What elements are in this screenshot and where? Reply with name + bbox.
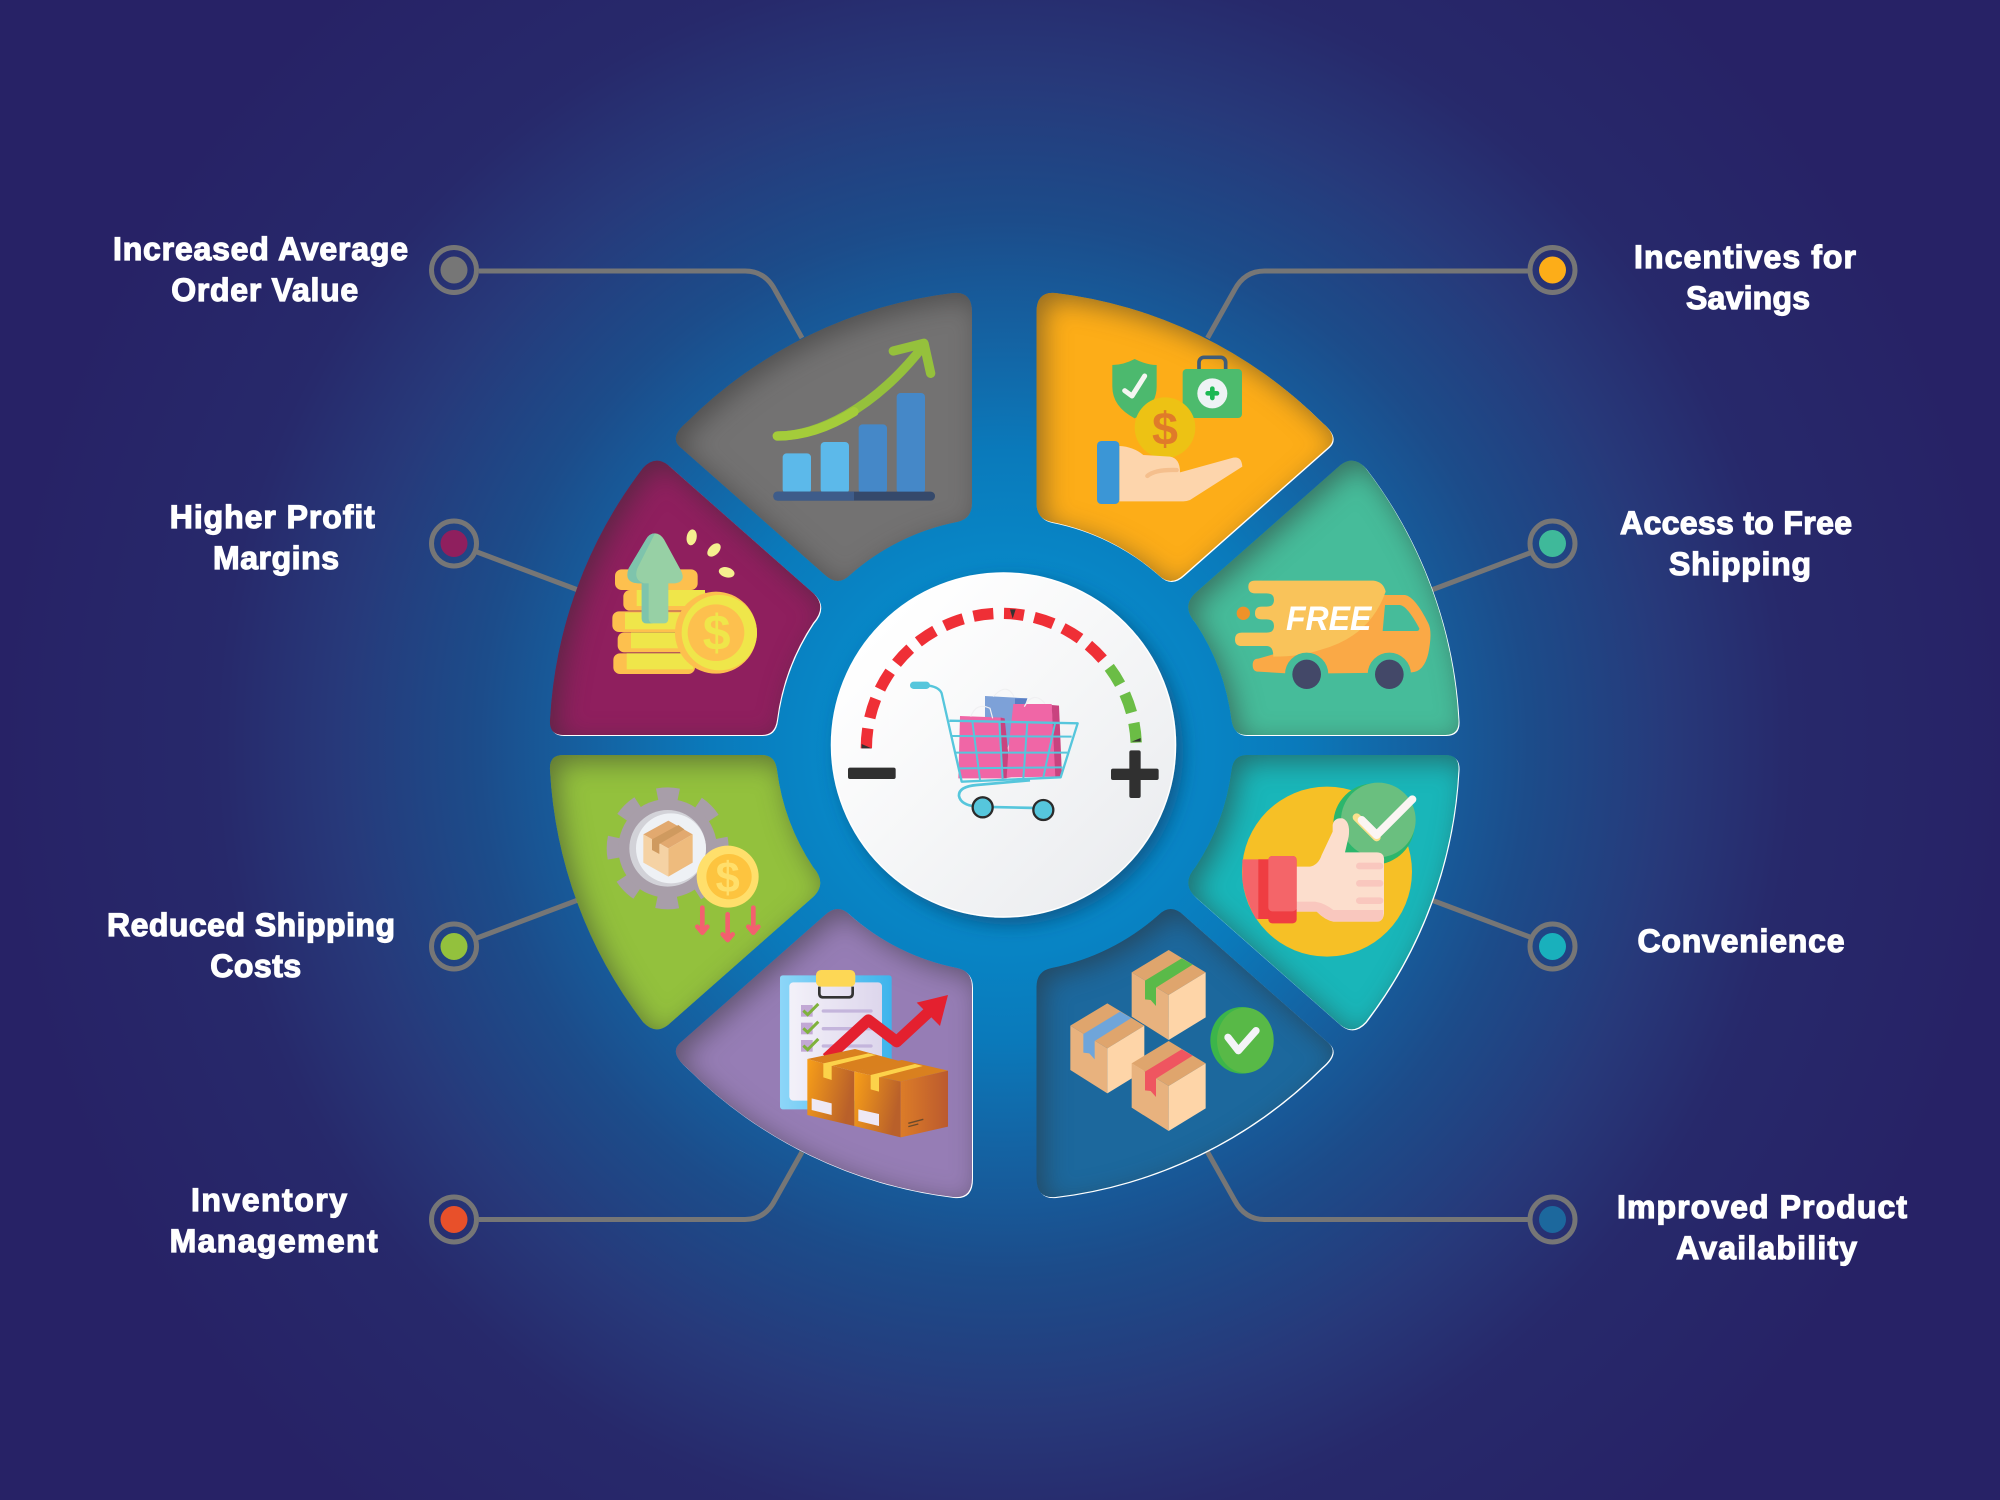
connectors and markers: [432, 248, 1575, 1242]
plus sign: [1111, 750, 1159, 798]
icon: free delivery truck: FREE: [1286, 600, 1372, 638]
label: improved product availability: Improved Product: [1617, 1189, 1907, 1225]
panel: maroon sector, profit margins: [550, 461, 821, 736]
label: increased average order value: Order Value: [171, 272, 358, 308]
icon: rising bar chart: [773, 343, 935, 501]
panel: lime sector, shipping costs: [550, 755, 820, 1029]
connector: improved product availability: [1208, 1152, 1575, 1242]
label: convenience: Convenience: [1638, 923, 1844, 959]
icon: thumbs up with check: [1242, 783, 1416, 957]
icon: hand, shield, coin and kit: $: [1152, 402, 1178, 454]
connector: access to free shipping: [1432, 521, 1575, 590]
panel: orange sector, savings: [1036, 293, 1334, 582]
label: improved product availability: Availability: [1676, 1230, 1857, 1266]
gauge: red dashes: [866, 613, 1103, 748]
panel: cyan sector, convenience: [1188, 755, 1460, 1030]
panel: blue sector, product availability: [1036, 909, 1334, 1198]
icon: shopping cart with bags: [910, 682, 1078, 820]
icon: coin stack with up arrow: [612, 529, 757, 674]
connector: increased average order value: [432, 248, 802, 338]
label: incentives for savings: Incentives for: [1634, 239, 1856, 275]
connector: higher profit margins: [432, 521, 578, 590]
icon: free delivery truck: [1235, 581, 1430, 696]
label: higher profit margins: Margins: [213, 540, 339, 576]
label: access to free shipping: Shipping: [1669, 546, 1811, 582]
label: higher profit margins: Higher Profit: [170, 499, 375, 535]
panel: gray sector, order value: [676, 293, 972, 581]
label: inventory management: Management: [170, 1223, 378, 1259]
connector: reduced shipping costs: [432, 900, 578, 969]
panel: green sector, free shipping: [1188, 461, 1460, 736]
panel: central gauge disc: [832, 573, 1176, 917]
icon: hand, shield, coin and kit: [1097, 357, 1242, 504]
minus sign: [848, 768, 896, 779]
label: reduced shipping costs: Costs: [210, 948, 301, 984]
panel: purple sector, inventory management: [676, 909, 973, 1198]
icon: gear, box and coin with down arrows: $: [716, 855, 740, 903]
label: increased average order value: Increased Average: [113, 231, 408, 267]
label: inventory management: Inventory: [191, 1182, 347, 1218]
label: access to free shipping: Access to Free: [1620, 505, 1852, 541]
connector: convenience: [1432, 900, 1575, 969]
icon: gear, box and coin with down arrows: [603, 784, 759, 940]
connector: inventory management: [432, 1152, 802, 1242]
icon: three boxes with check: [1070, 950, 1274, 1131]
label: reduced shipping costs: Reduced Shipping: [107, 907, 395, 943]
gauge: green dashes: [1109, 667, 1136, 743]
icon: coin stack with up arrow: $: [703, 605, 731, 661]
icon: clipboard, boxes and rising arrow: [780, 970, 948, 1137]
gauge and shopping cart: [848, 609, 1159, 820]
label: incentives for savings: Savings: [1686, 280, 1810, 316]
connector: incentives for savings: [1208, 248, 1575, 338]
